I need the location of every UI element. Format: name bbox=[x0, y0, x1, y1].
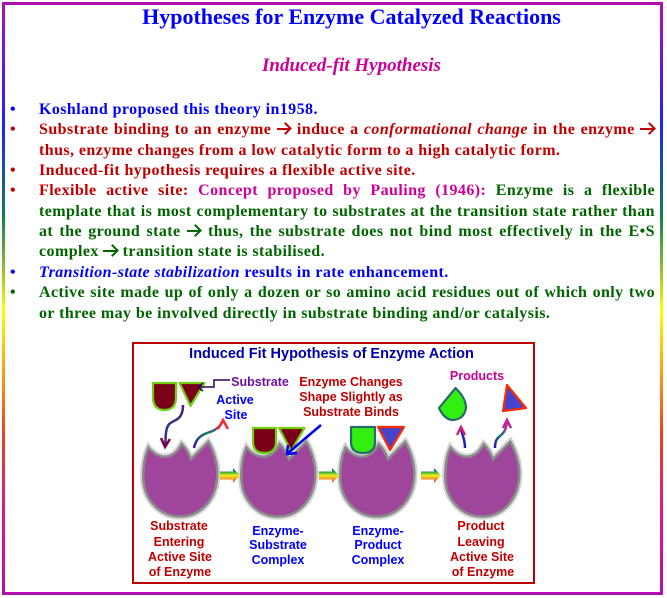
bullet list: template that is most complementary to substrates at the transition state rather than bbox=[39, 203, 655, 220]
diagram title: Induced Fit Hypothesis of Enzyme Action bbox=[189, 346, 474, 362]
label: enzyme changes shape bbox=[299, 375, 403, 419]
label: substrate: Substrate bbox=[231, 375, 289, 389]
rainbow arrows bbox=[220, 468, 441, 483]
arrow: substrate entering bbox=[161, 405, 183, 447]
arrow: product 1 leaving bbox=[457, 427, 465, 448]
title: Hypotheses for Enzyme Catalyzed Reactions bbox=[142, 4, 561, 29]
bullet list: complex transition state is stabilised. bbox=[39, 243, 325, 260]
caption 1: Substrate bbox=[150, 519, 208, 533]
icon: bound product bbox=[351, 427, 404, 453]
subtitle: Induced-fit Hypothesis bbox=[262, 55, 441, 76]
bullet list: Induced-fit hypothesis requires a flexible active site. bbox=[39, 162, 416, 179]
caption 1: Entering bbox=[154, 535, 204, 549]
icon: free substrate bbox=[153, 383, 204, 410]
bullet list: Transition-state stabilization results in rate enhancement. bbox=[39, 264, 449, 281]
caption 4: of Enzyme bbox=[452, 565, 514, 579]
caption 2 bbox=[249, 524, 307, 567]
caption 4: Leaving bbox=[457, 535, 505, 549]
icon: product 2 bbox=[503, 385, 526, 411]
bullet list: Substrate binding to an enzyme induce a conformational change in the enzyme bbox=[39, 121, 635, 138]
caption 2: Substrate bbox=[249, 538, 307, 552]
enzyme 4 bbox=[445, 442, 519, 516]
diagram box bbox=[133, 343, 534, 583]
enzyme 2 bbox=[241, 442, 315, 516]
label: active site: Active bbox=[216, 393, 254, 407]
caption 4 bbox=[450, 519, 514, 579]
icon: product 1 bbox=[439, 388, 466, 420]
caption 4: Product bbox=[457, 519, 505, 533]
caption 3: Product bbox=[354, 538, 402, 552]
caption 3: Enzyme- bbox=[352, 524, 404, 538]
arrow: blue pointer bbox=[287, 425, 321, 454]
label: products: Products bbox=[450, 369, 504, 383]
bullet list: • bbox=[10, 162, 16, 179]
label: enzyme changes shape: Substrate Binds bbox=[303, 405, 399, 419]
bullet list: thus, enzyme changes from a low catalytic form to a high catalytic form. bbox=[39, 142, 560, 159]
caption 2: Enzyme- bbox=[252, 524, 304, 538]
bullet list: at the ground state thus, the substrate does not bind most effectively in the E•S bbox=[39, 223, 655, 240]
enzyme 1 bbox=[143, 442, 217, 516]
bullet list: • bbox=[10, 284, 16, 301]
bullet list: • bbox=[10, 121, 16, 138]
panel: induced fit diagram: Site bbox=[225, 408, 248, 422]
icon: bound substrate bbox=[253, 428, 304, 453]
arrow: leaving enzyme bbox=[194, 420, 228, 448]
arrow: product 2 leaving bbox=[495, 420, 511, 448]
label: enzyme changes shape: Enzyme Changes bbox=[299, 375, 403, 389]
caption 4: Active Site bbox=[450, 550, 514, 564]
substrate leader line bbox=[198, 380, 230, 391]
bullet list: • bbox=[10, 101, 16, 118]
bullet list: Active site made up of only a dozen or so amino acid residues out of which only two bbox=[39, 284, 655, 301]
bullet list: • bbox=[10, 182, 16, 199]
label: enzyme changes shape: Shape Slightly as bbox=[299, 390, 403, 404]
bullet list: or three may be involved directly in substrate binding and/or catalysis. bbox=[39, 305, 550, 322]
caption 1: of Enzyme bbox=[149, 565, 211, 579]
bullet list: • bbox=[10, 264, 16, 281]
caption 1: Active Site bbox=[148, 550, 212, 564]
caption 1 bbox=[148, 519, 212, 579]
caption 3: Complex bbox=[352, 553, 404, 567]
caption 2: Complex bbox=[252, 553, 304, 567]
bullet list: Flexible active site: Concept proposed by Pauling (1946): Enzyme is a flexible bbox=[39, 182, 655, 199]
bullet list bbox=[10, 101, 656, 322]
enzyme 3 bbox=[340, 442, 414, 516]
bullet list: Koshland proposed this theory in1958. bbox=[39, 101, 318, 118]
caption 3 bbox=[352, 524, 404, 567]
